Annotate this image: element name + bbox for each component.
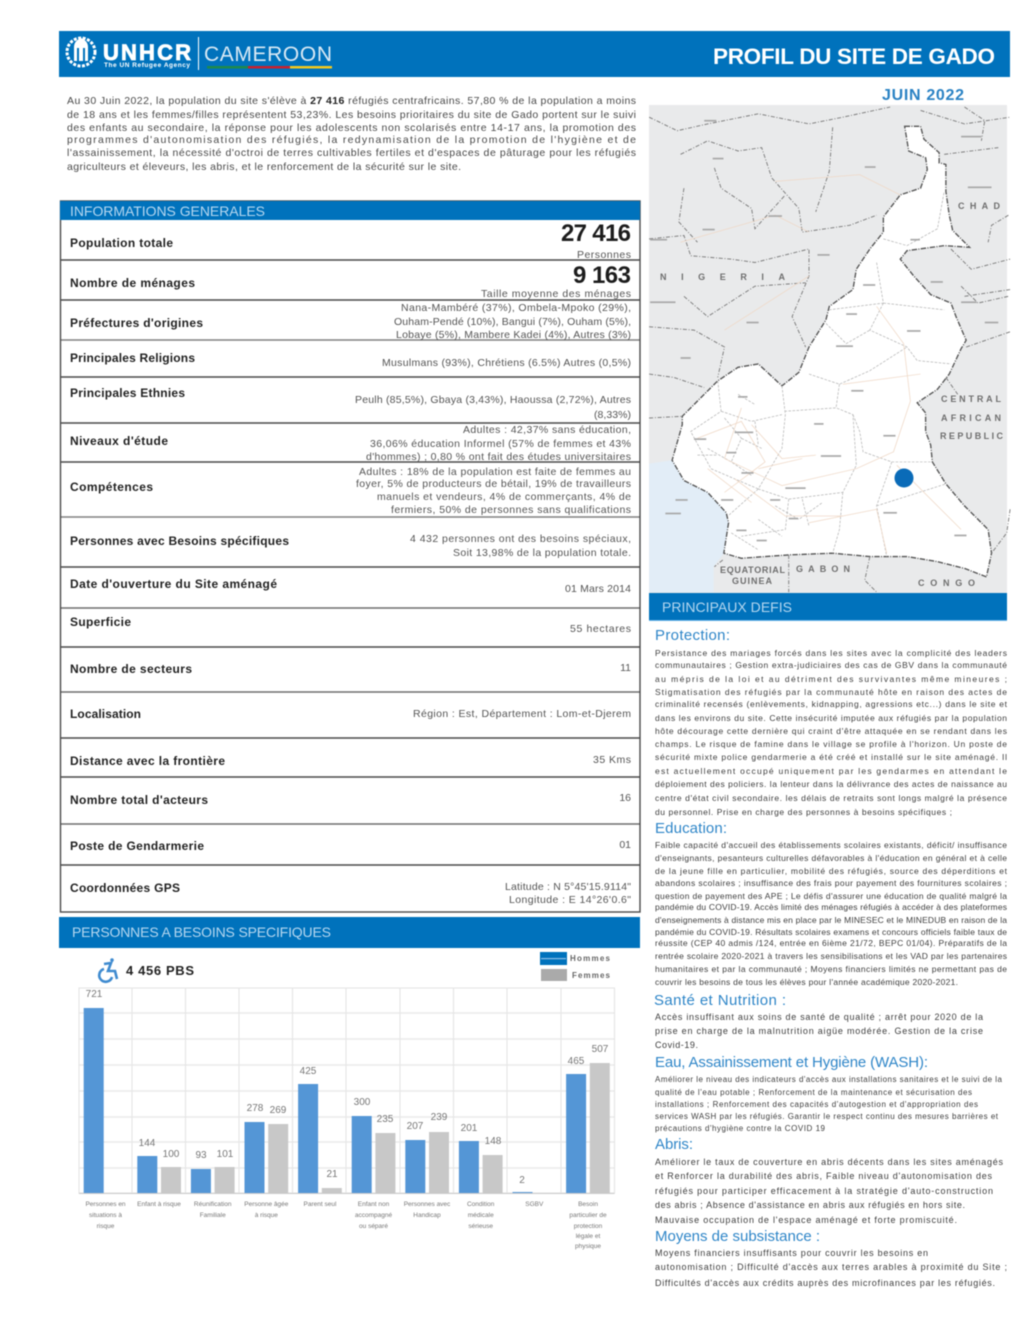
row: prefectures: Ouham-Pendé (10%), Bangui (7%), Ouham (5%), — [394, 316, 631, 328]
challenge: protection: Persistance des mariages forcés dans les sites avec la complicité des leaders — [655, 648, 1007, 658]
row: date d'ouverture: Date d'ouverture du Site aménagé — [70, 577, 277, 591]
bar value labels: 425 — [300, 1066, 317, 1077]
bar value labels: 239 — [431, 1112, 448, 1123]
bar value labels: 148 — [485, 1136, 502, 1147]
bar chart — [79, 988, 614, 1250]
challenge: protection: centre d'état civil secondaire. les délais de retraits sont longs malgré la présence — [655, 793, 1007, 803]
row: localisation: Localisation — [70, 707, 141, 721]
challenge: protection: est actuellement occupé uniquement par les gendarmes en attendant le — [655, 766, 1007, 776]
challenge: protection: déploiement des policiers. la lenteur dans la délivrance des actes de naissance au — [655, 779, 1007, 789]
category labels: ou séparé — [359, 1223, 388, 1230]
row: niveaux d'etude: d'hommes) ; 0,80 % ont fait des études universitaires — [366, 451, 631, 463]
row: nombre de menages: Nombre de ménages — [70, 276, 195, 290]
map country labels: EQUATORIAL — [720, 565, 786, 575]
roads — [681, 175, 961, 553]
challenge: protection: sécurité mixte police gendarmerie a été créé et installé sur le site aménagé. Il — [655, 752, 1007, 762]
category labels: Personne âgée — [244, 1201, 289, 1208]
site marker: Gado — [894, 468, 914, 488]
challenge: moyens de subsistance — [655, 1228, 1007, 1288]
section heading: PBS — [59, 917, 640, 948]
bar value labels: 269 — [270, 1105, 287, 1116]
bar value labels: 144 — [139, 1138, 156, 1149]
row: gendarmerie: Poste de Gendarmerie — [70, 839, 204, 853]
section heading: principaux defis: PRINCIPAUX DEFIS — [662, 599, 792, 615]
challenge: education: d'enseignants, pesanteurs culturelles défavorables à l'éducation en général et à celle — [655, 853, 1007, 863]
total PBS: 4 456 PBS — [126, 963, 194, 978]
bar value labels — [86, 989, 609, 1186]
challenge: protection: du personnel. Prise en charge des personnes à besoins spécifiques ; — [655, 807, 952, 817]
row: religions: Musulmans (93%), Chrétiens (6.5%) Autres (0,5%) — [382, 357, 631, 369]
category labels: particulier de — [569, 1212, 607, 1219]
row: superficie — [70, 615, 631, 635]
bar value labels: 721 — [86, 989, 103, 1000]
row: ethnies: Principales Ethnies — [70, 386, 185, 400]
category labels: Enfant à risque — [137, 1201, 181, 1208]
challenge: protection: Protection: — [655, 627, 730, 644]
section heading: informations generales: INFORMATIONS GENERALES — [70, 203, 265, 219]
row: niveaux d'etude: Niveaux d'étude — [70, 434, 168, 448]
category labels: Enfant non — [358, 1201, 390, 1208]
row: coordonnees GPS: Longitude : E 14°26'0.6" — [509, 894, 631, 906]
challenge: education: pandémie du COVID-19. Accès limité des ménages réfugiés à accéder à des plateformes — [655, 902, 1007, 912]
section heading: PBS: PERSONNES A BESOINS SPECIFIQUES — [72, 924, 331, 940]
challenge: abris: réfugiés pour participer efficacement à la stratégie d'auto-construction — [655, 1186, 993, 1196]
map country labels — [660, 201, 1004, 588]
category labels: SGBV — [525, 1201, 544, 1208]
row: distance — [70, 754, 631, 768]
challenge: protection: hôte décourage cette dernière qui craint d'être attaquée en se rendant dans les — [655, 726, 1007, 736]
challenge: eau, assainissement et hygiene — [655, 1054, 1003, 1133]
section heading: principaux defis — [649, 593, 1007, 621]
category labels: risque — [97, 1223, 115, 1230]
challenge: education: d'enseignements à distance mis en place par le MINESEC et le MINEDUB en raison de la — [655, 915, 1007, 925]
row: prefectures: Lobaye (5%), Mambere Kadei (4%), Autres (3%) — [396, 329, 631, 341]
bar value labels: 2 — [519, 1175, 525, 1186]
challenge: education — [655, 820, 1008, 987]
challenge: sante et nutrition — [654, 992, 983, 1050]
row: prefectures — [70, 302, 631, 341]
bar value labels: 465 — [568, 1056, 585, 1067]
bar value labels: 278 — [247, 1103, 264, 1114]
row: competences — [70, 466, 631, 516]
map country labels: GABON — [796, 564, 850, 574]
UNHCR logo: CAMEROON — [204, 43, 332, 66]
row: gendarmerie: 01 — [619, 839, 631, 851]
intro paragraph: l'assainissement, la nécessité d'octroi de terres cultivables fertiles et d'espaces de pâturage pour les réfugiés — [67, 147, 636, 159]
row: ethnies — [70, 386, 631, 421]
row: niveaux d'etude — [70, 424, 631, 463]
challenge: abris: Améliorer le taux de couverture en abris décents dans les sites aménagés — [655, 1157, 1004, 1167]
neighbouring borders — [649, 107, 1010, 592]
category labels: physique — [575, 1243, 601, 1250]
challenge: protection: Stigmatisation des réfugiés par la communauté hôte en raison des actes de — [655, 687, 1007, 697]
row: distance: Distance avec la frontière — [70, 754, 225, 768]
legend — [540, 952, 611, 981]
row: superficie: Superficie — [70, 615, 131, 629]
challenge: education: de la jeune fille en particulier, mobilité des réfugiés, source des déperditions et — [655, 866, 1008, 876]
category labels: Personnes en — [85, 1201, 126, 1208]
sea — [649, 460, 729, 592]
section heading: informations generales — [60, 201, 640, 220]
row: population totale: Population totale — [70, 236, 173, 250]
challenge: education: abandons scolaires ; insuffisance des frais pour payement des fournitures scolaires ; — [655, 878, 1007, 888]
category labels — [85, 1201, 607, 1250]
bar value labels: 201 — [461, 1123, 478, 1134]
challenge: abris: et Renforcer la durabilité des abris, Faible niveau d'autonomisation des — [655, 1171, 992, 1181]
row: gendarmerie — [70, 839, 631, 853]
row: besoins specifiques — [70, 533, 631, 559]
challenge: eau, assainissement et hygiene: services WASH par les réfugiés. Garantir le respect continu des mesures barrières et — [655, 1112, 999, 1121]
row: localisation: Région : Est, Département : Lom-et-Djerem — [413, 708, 631, 720]
panel: informations generales — [60, 201, 640, 912]
row: coordonnees GPS: Coordonnées GPS — [70, 881, 180, 895]
category labels: accompagné — [355, 1212, 392, 1219]
map country labels: CHAD — [958, 201, 1000, 211]
challenge: abris: Abris: — [655, 1136, 693, 1153]
challenge: eau, assainissement et hygiene: Améliorer le niveau des indicateurs d'accès aux installations sanitaires et le suivi de la — [655, 1075, 1003, 1084]
row: population totale: Personnes — [577, 249, 631, 261]
row: ethnies: Peulh (85,5%), Gbaya (3,43%), Haoussa (2,72%), Autres — [355, 394, 631, 406]
intro paragraph: Au 30 Juin 2022, la population du site s'élève à 27 416 réfugiés centrafricains. 57,80 % de la population a moins — [67, 95, 636, 107]
provinces inside Cameroon — [691, 192, 951, 557]
row: distance: 35 Kms — [593, 754, 631, 766]
challenge: eau, assainissement et hygiene: qualité de l'eau potable ; Renforcement de la maintenance et sécurisation des — [655, 1088, 972, 1097]
challenge: sante et nutrition: Covid-19. — [655, 1040, 698, 1050]
panel: principaux defis — [649, 593, 1008, 1288]
category labels: à risque — [255, 1212, 278, 1219]
UNHCR logo — [67, 37, 332, 70]
intro paragraph — [67, 95, 636, 173]
challenge: protection: au mépris de la loi et au détriment des survivantes même mineures ; — [655, 674, 1007, 684]
row: besoins specifiques: Soit 13,98% de la population totale. — [453, 547, 631, 559]
row: population totale — [70, 220, 631, 261]
row: prefectures: Préfectures d'origines — [70, 316, 203, 330]
panel: personnes a besoins specifiques — [59, 917, 640, 1250]
row: niveaux d'etude: Adultes : 42,37% sans éducation, — [463, 424, 631, 436]
challenge: education: Education: — [655, 820, 727, 837]
map country labels: NIGERIA — [660, 272, 786, 282]
row: superficie: 55 hectares — [570, 623, 631, 635]
challenge: education: couvrir les besoins de tous les élèves pour l'année académique 2020-2021. — [655, 977, 958, 987]
challenge: moyens de subsistance: Moyens financiers insuffisants pour couvrir les besoins en — [655, 1248, 928, 1258]
intro paragraph: agriculteurs et éleveurs, les abris, et le renforcement de la sécurité sur le site. — [67, 161, 461, 173]
challenge: education: pandémie du COVID-19. Résultats scolaires examens et concours officiels faible taux de — [655, 927, 1007, 937]
category labels: Condition — [467, 1201, 495, 1208]
row: ethnies: (8,33%) — [594, 409, 631, 421]
row: coordonnees GPS: Latitude : N 5°45'15.9114" — [505, 881, 631, 893]
map country labels: REPUBLIC — [940, 431, 1004, 441]
Cameroon territory — [672, 126, 992, 577]
row: secteurs — [70, 662, 631, 676]
row: acteurs: 16 — [619, 792, 631, 804]
map country labels: GUINEA — [732, 576, 772, 586]
category labels: Besoin — [578, 1201, 598, 1208]
row: competences: Compétences — [70, 480, 153, 494]
challenge: eau, assainissement et hygiene: installations ; Renforcement des capacités d'autogestion et d'appropriation des — [655, 1100, 978, 1109]
challenge: protection — [655, 627, 1008, 817]
intro paragraph: des enfants au secondaire, la réponse pour les adolescents non scolarisés entre 14-17 ans, la promotion des — [67, 122, 636, 134]
row: date d'ouverture — [70, 577, 631, 595]
legend: Hommes — [570, 954, 611, 963]
bar value labels: 507 — [592, 1044, 609, 1055]
category labels: Parent seul — [304, 1201, 337, 1208]
challenge: moyens de subsistance: autonomisation ; Difficulté d'accès aux terres arables à proximité du Site ; — [655, 1262, 1007, 1272]
row: secteurs: 11 — [620, 662, 631, 674]
row: localisation — [70, 707, 631, 721]
row: nombre de menages — [70, 262, 631, 300]
row: competences: fermiers, 50% de personnes sans qualifications — [391, 504, 631, 516]
map country labels: CENTRAL — [941, 394, 1002, 404]
map country labels: AFRICAN — [941, 413, 1001, 423]
challenge: education: question de payement des APE ; Le défis d'assurer une éducation de qualité malgré la — [655, 891, 1007, 901]
row: besoins specifiques: Personnes avec Besoins spécifiques — [70, 534, 289, 548]
challenge: protection: criminalité recensés (enlèvements, kidnapping, agressions etc...) dans le site et — [655, 699, 1008, 709]
category labels: légale et — [576, 1233, 600, 1240]
challenge: education: Faible capacité d'accueil des établissements scolaires existants, déficit/ insuffisance — [655, 840, 1007, 850]
challenge: abris: des abris ; Absence d'assistance en abris aux réfugiés en hors site. — [655, 1200, 965, 1210]
UNHCR logo: The UN Refugee Agency — [104, 62, 190, 69]
row: acteurs — [70, 792, 631, 807]
row: nombre de menages: 9 163 — [573, 262, 631, 289]
map of Cameroon — [649, 105, 1010, 593]
challenge: sante et nutrition: Accès insuffisant aux soins de santé de qualité ; arrêt pour 2020 de la — [655, 1012, 983, 1022]
bar value labels: 93 — [195, 1150, 207, 1161]
row: religions — [70, 351, 631, 369]
row: population totale: 27 416 — [561, 220, 631, 247]
category labels: protection — [574, 1223, 603, 1230]
challenge: moyens de subsistance: Moyens de subsistance : — [655, 1228, 820, 1245]
bar value labels: 300 — [354, 1097, 371, 1108]
map country labels: CONGO — [918, 578, 975, 588]
intro paragraph: programmes d'autonomisation des réfugiés, la redynamisation de la promotion de l'hygiène et de — [67, 134, 636, 146]
challenge: education: humanitaires et par la communauté ; Moyens financiers limités ne permettant pas de — [655, 964, 1007, 974]
row: besoins specifiques: 4 432 personnes ont des besoins spéciaux, — [410, 533, 631, 545]
challenge: protection: dans les environs du site. Cette insécurité imputée aux réfugiés par la population — [655, 713, 1007, 723]
date: JUIN 2022 — [882, 87, 964, 104]
bar value labels: 101 — [217, 1149, 234, 1160]
row: prefectures: Nana-Mambéré (37%), Ombela-Mpoko (29%), — [401, 302, 631, 314]
bar value labels: 100 — [163, 1149, 180, 1160]
legend: Femmes — [572, 971, 611, 980]
challenge: protection: communautaires ; Gestion extra-judiciaires des cas de GBV dans la communauté — [655, 660, 1007, 670]
challenge: eau, assainissement et hygiene: Eau, Assainissement et Hygiène (WASH): — [655, 1054, 928, 1071]
challenge: sante et nutrition: Santé et Nutrition : — [654, 992, 786, 1009]
row: competences: foyer, 5% de producteurs de bétail, 19% de travailleurs — [356, 478, 631, 490]
bar value labels: 235 — [377, 1114, 394, 1125]
row: religions: Principales Religions — [70, 351, 195, 365]
row: competences: manuels et vendeurs, 4% de commerçants, 4% de — [377, 491, 631, 503]
row: secteurs: Nombre de secteurs — [70, 662, 192, 676]
challenge: moyens de subsistance: Difficultés d'accès aux crédits auprès des microfinances par les réfugiés. — [655, 1278, 995, 1288]
intro paragraph: de 18 ans et les femmes/filles représentent 53,23%. Les besoins prioritaires du site de Gado portent sur le suivi — [67, 109, 636, 121]
header banner — [59, 31, 1010, 77]
row: competences: Adultes : 18% de la population est faite de femmes au — [359, 466, 631, 478]
challenge: sante et nutrition: prise en charge de la malnutrition aigüe modérée. Gestion de la crise — [655, 1026, 983, 1036]
category labels: situations à — [89, 1212, 122, 1219]
challenge: abris: Mauvaise occupation de l'espace aménagé et forte promiscuité. — [655, 1215, 957, 1225]
icon: wheelchair — [99, 958, 117, 982]
challenge: eau, assainissement et hygiene: précautions d'hygiène contre la COVID 19 — [655, 1124, 826, 1133]
row: date d'ouverture: 01 Mars 2014 — [565, 583, 631, 595]
challenge: protection: champs. Le risque de famine dans le village se profile à l'horizon. Un poste de — [655, 739, 1007, 749]
category labels: Familiale — [200, 1212, 226, 1219]
category labels: sérieuse — [468, 1223, 493, 1230]
challenge: abris — [655, 1136, 1004, 1225]
challenge: education: rentrée scolaire 2020-2021 à travers les sensibilisations et les VAD par les partenaires — [655, 951, 1007, 961]
category labels: Handicap — [413, 1212, 441, 1219]
place-name specks — [650, 120, 998, 541]
category labels: médicale — [468, 1212, 494, 1219]
row: niveaux d'etude: 36,06% éducation Informel (57% de femmes et 43% — [370, 438, 631, 450]
category labels: Réunification — [194, 1201, 232, 1208]
challenge: education: réussite (CEP 40 admis /124, entrée en 6ième 21/72, BEPC 01/04). Préparatifs de la — [655, 938, 1007, 948]
row: nombre de menages: Taille moyenne des ménages — [481, 288, 631, 300]
category labels: Personnes avec — [404, 1201, 451, 1208]
bar value labels: 21 — [326, 1169, 338, 1180]
UNHCR logo: UNHCR — [103, 40, 191, 65]
row: coordonnees GPS — [70, 881, 631, 906]
bar value labels: 207 — [407, 1121, 424, 1132]
row: acteurs: Nombre total d'acteurs — [70, 793, 208, 807]
page title: PROFIL DU SITE DE GADO — [713, 44, 995, 69]
